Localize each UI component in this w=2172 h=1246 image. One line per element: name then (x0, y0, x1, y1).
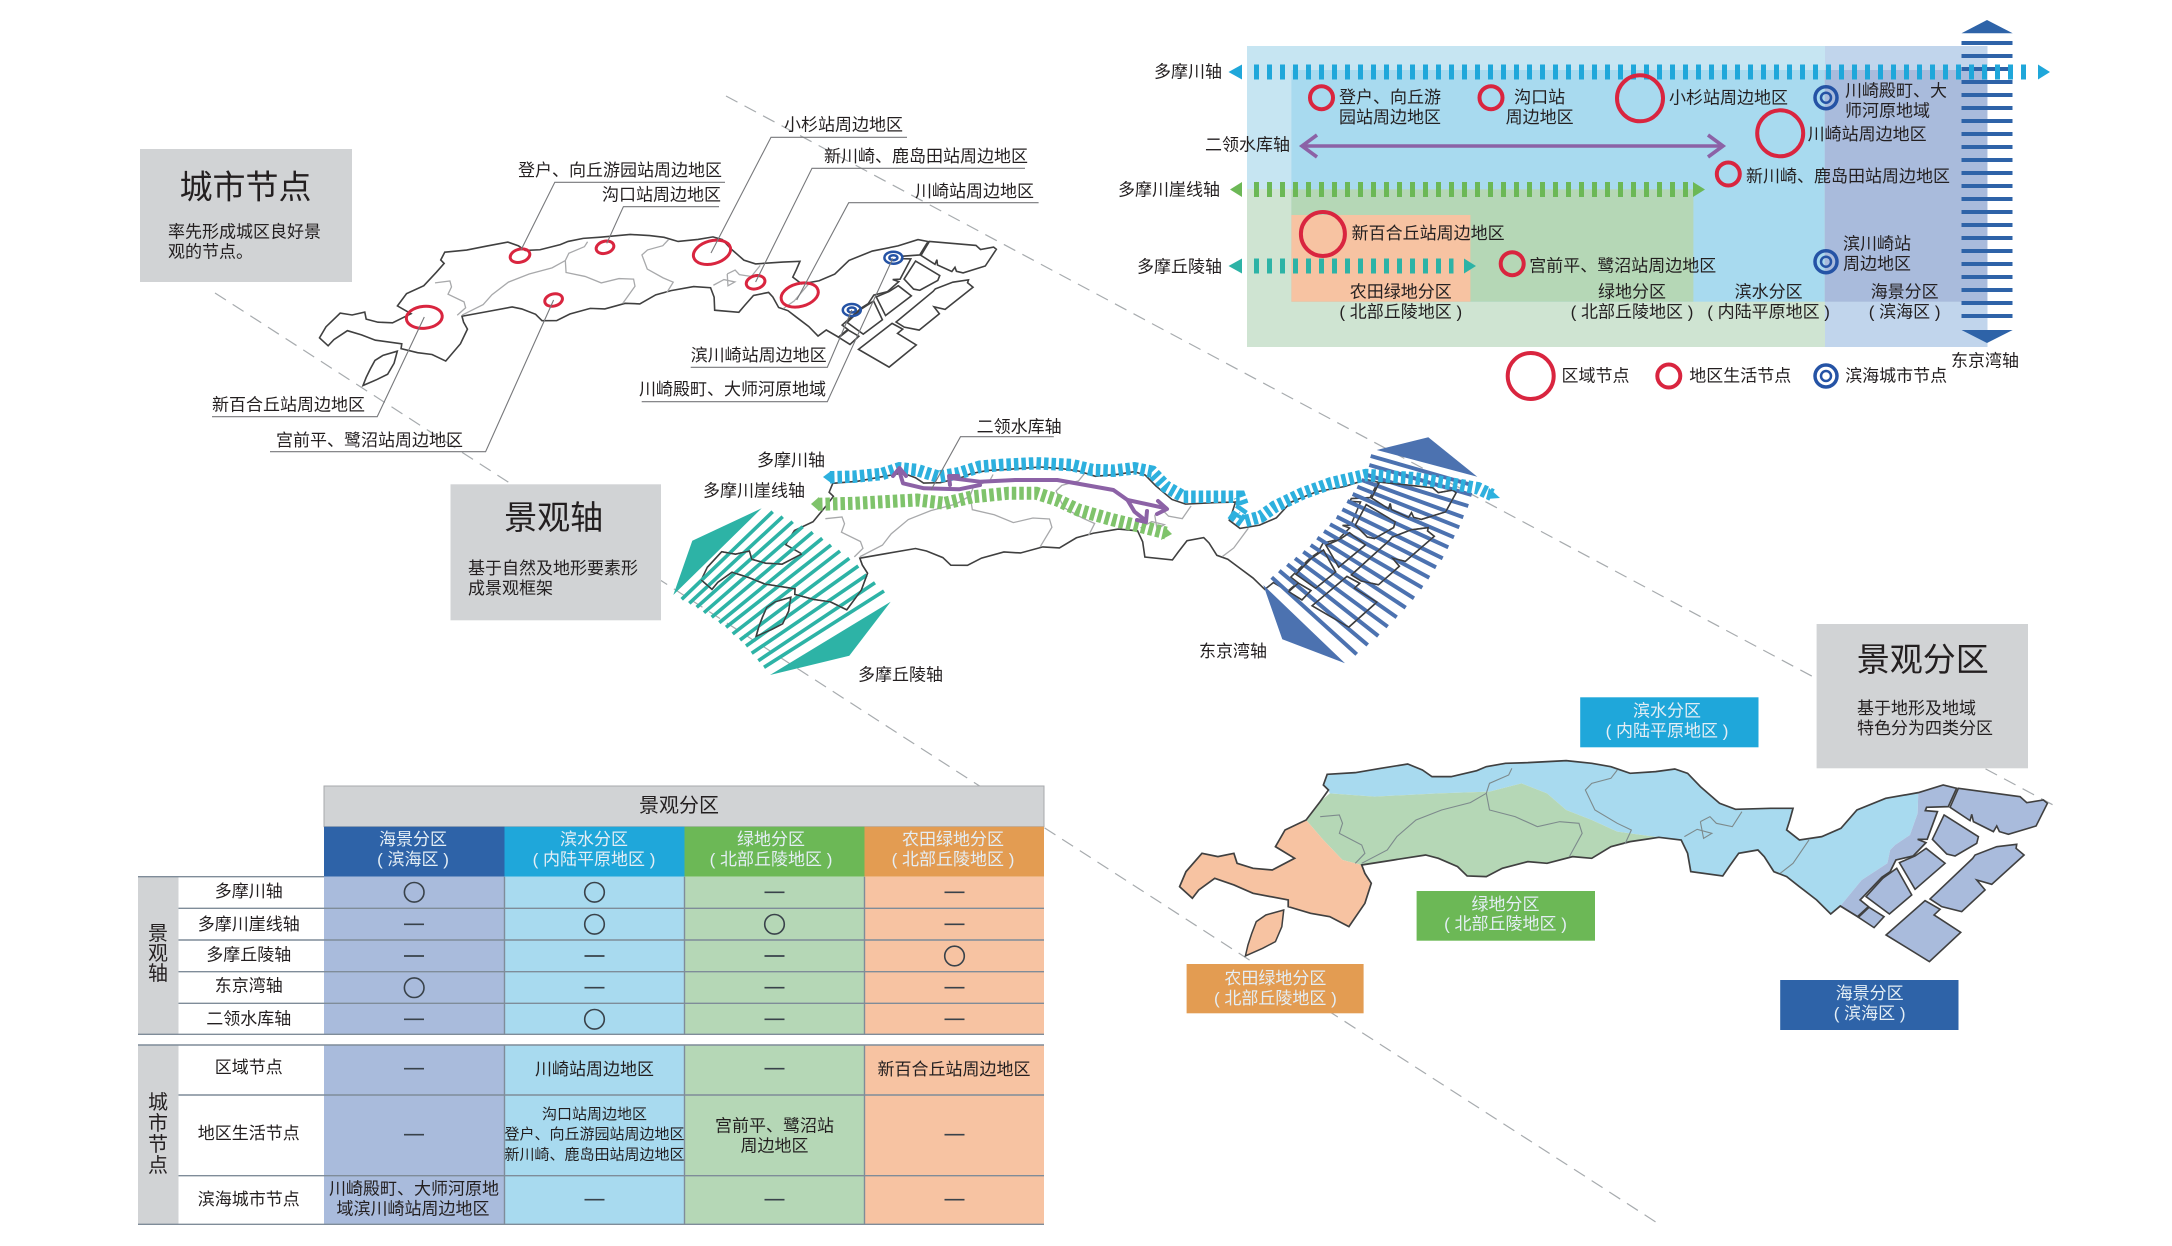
table header: 景观分区 (639, 794, 719, 817)
axis labels: 二领水库轴 (977, 418, 1062, 436)
node labels: 宫前平、鹭沼站周边地区 (1529, 256, 1716, 276)
heading box: 景观分区: 基于地形及地域 (1857, 699, 1976, 718)
zone labels: ( 滨海区 ) (1869, 302, 1941, 322)
table section: landscape axes: 二领水库轴 (206, 1010, 291, 1028)
zone tag: farmland (1187, 964, 1364, 1013)
table section: landscape axes: 多摩川崖线轴 (198, 915, 300, 934)
zone background: outer light (1247, 46, 1988, 347)
zone labels: 绿地分区 (1598, 282, 1666, 302)
node labels: 川崎站周边地区 (1808, 125, 1927, 144)
axis: Tamagawa cliff line (1230, 182, 1705, 197)
zone tag: waterfront: ( 内陆平原地区 ) (1606, 722, 1728, 740)
zone map (1180, 761, 2047, 962)
table header: ( 内陆平原地区 ) (533, 850, 655, 869)
table header: ( 北部丘陵地区 ) (892, 850, 1014, 869)
table section: city nodes: 城 (148, 1091, 168, 1114)
zone tag: green: ( 北部丘陵地区 ) (1444, 914, 1567, 934)
table section: landscape axes: 多摩丘陵轴 (206, 946, 291, 964)
table section: city nodes: 地区生活节点 (198, 1124, 300, 1143)
heading box: 景观轴: 景观轴 (504, 499, 603, 536)
node labels: 沟口站周边地区 (602, 186, 721, 204)
heading box: 景观分区: 景观分区 (1857, 641, 1989, 678)
axis: Tama hills (1228, 258, 1476, 274)
heading box: 景观轴: 基于自然及地形要素形 (468, 559, 638, 578)
table section: landscape axes (138, 877, 1044, 1034)
table header: 农田绿地分区 (902, 830, 1004, 849)
node labels: 川崎殿町、大师河原地域 (639, 380, 826, 399)
zone tag: waterfront (1580, 697, 1758, 747)
axis: Futaryo reservoir (893, 468, 1167, 522)
axis labels: 二领水库轴 (1205, 136, 1290, 154)
axis labels: 多摩川崖线轴 (1118, 180, 1220, 200)
axis: Tamagawa cliff line (811, 493, 1172, 540)
node circles (1301, 75, 1803, 275)
zone labels: 滨水分区 (1735, 282, 1803, 302)
waterfront node markers (843, 252, 902, 316)
heading box: 景观分区 (1817, 624, 2028, 768)
zone labels: ( 北部丘陵地区 ) (1571, 302, 1693, 322)
table section: landscape axes: 景 (148, 923, 168, 945)
axis: Tokyo Bay vertical (1962, 20, 2013, 343)
node labels: 园站周边地区 (1339, 108, 1441, 127)
axis: Tamagawa river (823, 463, 1500, 522)
axis labels (1118, 62, 2019, 370)
legend: 滨海城市节点 (1845, 366, 1947, 386)
node labels: 小杉站周边地区 (784, 116, 903, 134)
heading box: 城市节点: 率先形成城区良好景 (168, 222, 321, 242)
axis labels: 多摩丘陵轴 (858, 666, 943, 684)
axis labels: 多摩丘陵轴 (1137, 258, 1222, 276)
map outline: city nodes (312, 219, 1001, 392)
axis: Tama hills hatch (673, 508, 891, 675)
heading box: 城市节点: 观的节点。 (168, 242, 253, 262)
node labels: 沟口站 (1514, 88, 1565, 107)
node labels: 新川崎、鹿岛田站周边地区 (824, 147, 1028, 166)
zone tag: seascape: 海景分区 (1836, 984, 1904, 1003)
table header: ( 北部丘陵地区 ) (710, 850, 832, 869)
heading box: 城市节点: 城市节点 (180, 168, 312, 206)
table section: city nodes: 区域节点 (215, 1058, 283, 1077)
table section: city nodes: 新川崎、鹿岛田站周边地区 (504, 1146, 685, 1164)
axis: Futaryo reservoir (1302, 135, 1723, 157)
node labels: 宫前平、鹭沼站周边地区 (276, 431, 463, 450)
table section: city nodes: 节 (148, 1133, 168, 1156)
table section: city nodes: 宫前平、鹭沼站 (715, 1116, 834, 1136)
node labels: 川崎站周边地区 (915, 182, 1034, 201)
panel: landscape zones map (1180, 624, 2047, 1030)
zone tag: farmland: 农田绿地分区 (1224, 969, 1326, 988)
heading box: 景观分区: 特色分为四类分区 (1857, 719, 1993, 738)
panel: city nodes map (140, 116, 1039, 452)
panel: summary table (138, 786, 1044, 1224)
node labels: 登户、向丘游园站周边地区 (518, 161, 722, 180)
node labels: 新百合丘站周边地区 (212, 396, 365, 414)
axis labels: 多摩川崖线轴 (703, 482, 805, 500)
node labels (1339, 82, 1950, 276)
zone labels: 海景分区 (1871, 282, 1939, 302)
node labels: 滨川崎站 (1843, 234, 1911, 254)
diagonal divider upper (726, 96, 2055, 806)
table header: 海景分区 (379, 830, 447, 849)
table section: landscape axes: 多摩川轴 (215, 882, 283, 901)
leader lines (212, 137, 1039, 452)
legend (1508, 353, 1947, 399)
zone tag: green: 绿地分区 (1472, 895, 1540, 914)
node labels: 新川崎、鹿岛田站周边地区 (1746, 167, 1950, 186)
node labels: 周边地区 (1506, 108, 1574, 127)
table section: city nodes: 周边地区 (740, 1136, 808, 1156)
zone tag: green (1417, 891, 1595, 941)
heading box: 景观轴 (450, 484, 661, 620)
zone labels: ( 内陆平原地区 ) (1707, 302, 1830, 322)
table header: 绿地分区 (737, 830, 805, 849)
panel: landscape axes map (450, 418, 1500, 684)
legend: 区域节点 (1562, 366, 1630, 386)
table section: city nodes: 市 (148, 1112, 168, 1135)
axis: Tokyo Bay hatch (1263, 437, 1477, 663)
table header (324, 786, 1044, 877)
heading box: 城市节点 (140, 149, 352, 282)
regional and local node markers (405, 236, 821, 330)
zone labels: ( 北部丘陵地区 ) (1339, 302, 1462, 322)
table section: city nodes: 滨海城市节点 (198, 1190, 300, 1209)
node labels: 滨川崎站周边地区 (691, 346, 827, 365)
table section: city nodes: 沟口站周边地区 (542, 1106, 647, 1123)
zone background: inner (1291, 70, 1987, 302)
waterfront circles (1815, 87, 1837, 273)
table section: city nodes: 川崎站周边地区 (535, 1060, 654, 1079)
axis: Tamagawa horizontal (1228, 64, 2050, 80)
table section: landscape axes: 轴 (148, 962, 168, 985)
legend: 地区生活节点 (1689, 366, 1791, 386)
table section: city nodes: 新百合丘站周边地区 (878, 1060, 1030, 1079)
axis labels: 多摩川轴 (1154, 62, 1222, 82)
node labels: 新百合丘站周边地区 (1352, 224, 1505, 243)
node labels: 川崎殿町、大 (1845, 82, 1947, 100)
zone tag: seascape: ( 滨海区 ) (1834, 1004, 1906, 1023)
zone labels (1339, 282, 1941, 322)
zone tag: waterfront: 滨水分区 (1633, 702, 1701, 720)
axis labels: 东京湾轴 (1951, 352, 2019, 370)
diagonal divider lower (215, 293, 1662, 1226)
table section: city nodes: 川崎殿町、大师河原地 (329, 1180, 499, 1198)
table section: landscape axes: 观 (148, 943, 168, 965)
table section: city nodes: 登户、向丘游园站周边地区 (504, 1126, 685, 1143)
map outline: axes (699, 457, 1458, 642)
map detail over hatch (699, 480, 1457, 642)
table section: landscape axes: 东京湾轴 (215, 976, 283, 996)
table section: city nodes: 域滨川崎站周边地区 (336, 1200, 490, 1218)
zone tag: seascape (1780, 980, 1958, 1030)
axis labels: 东京湾轴 (1199, 642, 1267, 661)
axis labels (703, 418, 1267, 684)
table section: city nodes (138, 1045, 1044, 1224)
node labels (212, 116, 1034, 450)
table header: 滨水分区 (560, 830, 628, 849)
node labels: 周边地区 (1843, 254, 1911, 274)
zone tag: farmland: ( 北部丘陵地区 ) (1214, 989, 1337, 1008)
node labels: 师河原地域 (1845, 102, 1930, 120)
axis labels: 多摩川轴 (757, 451, 825, 470)
node labels: 小杉站周边地区 (1669, 88, 1788, 108)
table section: city nodes: 点 (148, 1154, 168, 1177)
table header: ( 滨海区 ) (377, 850, 449, 869)
node labels: 登户、向丘游 (1339, 88, 1441, 107)
zone labels: 农田绿地分区 (1350, 282, 1452, 302)
heading box: 景观轴: 成景观框架 (468, 579, 553, 598)
panel: relationship diagram (1118, 20, 2050, 399)
